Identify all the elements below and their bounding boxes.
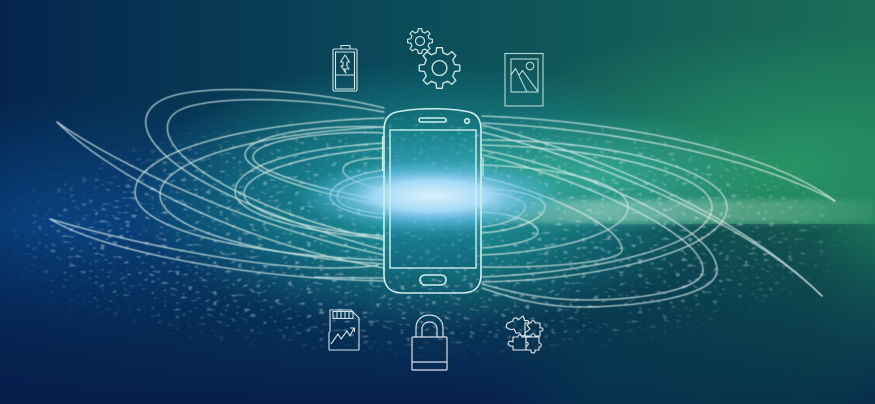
icon: gears: [408, 29, 460, 88]
phone body: [384, 109, 481, 293]
scattered data particles: [12, 112, 846, 356]
side buttons: [382, 137, 483, 175]
big ellipses right: [482, 140, 727, 282]
big ellipses left: [135, 118, 384, 260]
orbit lines: [50, 90, 835, 307]
speaker: [419, 118, 446, 122]
light band to the right of the phone: [480, 200, 875, 223]
lower right arcs: [482, 150, 717, 307]
right top arcs to tip: [482, 116, 835, 201]
home button: [420, 275, 446, 285]
large gear: [419, 48, 460, 88]
phone: [382, 109, 483, 293]
icon: puzzle pieces: [506, 316, 543, 353]
camera: [465, 119, 469, 123]
icon: padlock: [412, 315, 447, 370]
upper left loops: [146, 90, 384, 250]
right swoosh to lower tip: [482, 125, 822, 296]
icon: picture: [505, 54, 543, 106]
inner ellipses right: [482, 188, 545, 233]
icon: battery: [333, 46, 357, 91]
icon: memory card with chart: [329, 310, 359, 350]
lower left swoosh: [50, 219, 378, 268]
central glow: [297, 160, 567, 232]
inner ellipses left: [330, 170, 384, 218]
phone screen tint: [390, 130, 476, 268]
left swoosh from upper tip: [57, 122, 384, 268]
phone screen outline: [390, 130, 476, 268]
small gear: [408, 29, 432, 53]
